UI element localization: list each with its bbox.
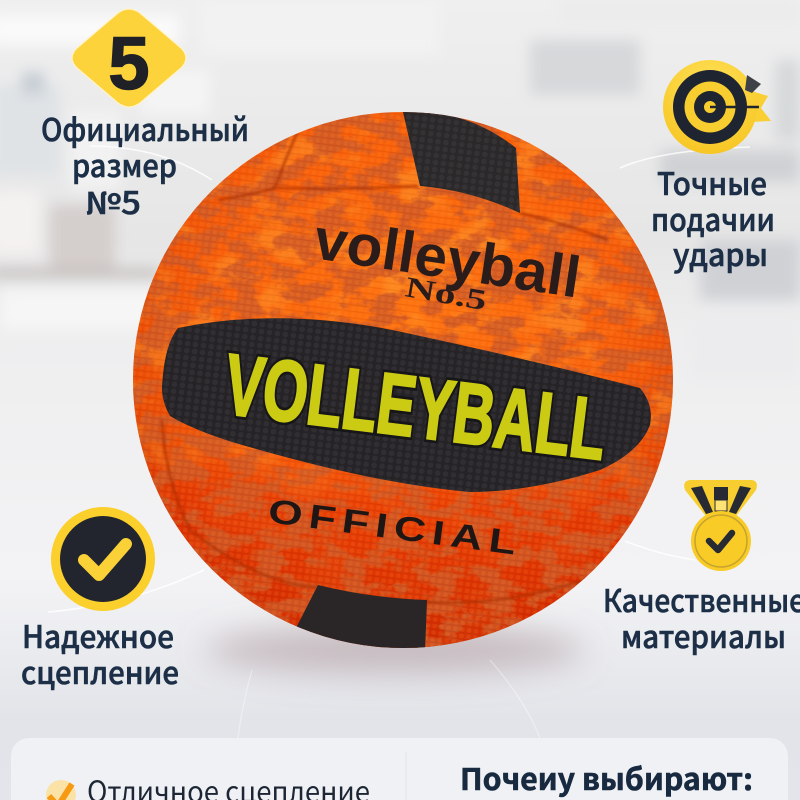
label: VOLLEYBALL: [220, 337, 612, 479]
ball mottled texture: [133, 112, 673, 648]
bottom black panel: [296, 585, 427, 652]
heading: reliable grip: сцепление: [21, 648, 179, 693]
heading: accurate serves: [651, 159, 775, 275]
heading: official size: №5: [85, 178, 141, 223]
ball shadow: [205, 626, 585, 674]
heading: accurate serves: удары: [673, 230, 768, 275]
label: volleyball script: volleyball: [310, 207, 585, 310]
top black panel: [403, 112, 520, 213]
ball light patches: [133, 112, 673, 648]
heading: quality materials: [603, 576, 800, 657]
heading: quality materials: материалы: [621, 612, 786, 657]
icon: size 5 diamond: 5: [108, 22, 150, 105]
icon: reliable grip check: [51, 507, 155, 611]
heading: reliable grip: Надежное: [22, 612, 174, 657]
ball pebble texture: [133, 112, 673, 648]
panel heading: Почеиу выбирают:: [460, 755, 753, 799]
panel: benefits: [11, 738, 788, 800]
icon: size 5 diamond: [72, 9, 186, 107]
heading: accurate serves: подачии: [651, 195, 775, 240]
ball seams: [162, 133, 625, 603]
heading: accurate serves: Точные: [657, 159, 767, 204]
lower ball tint: [144, 453, 661, 648]
heading: official size: Официальный: [41, 105, 249, 150]
callout curves: [48, 146, 750, 612]
label: OFFICIAL: OFFICIAL: [266, 492, 525, 563]
floor lines: [238, 660, 540, 738]
icon: orange check: [46, 780, 76, 800]
icon: quality medal: [684, 480, 757, 571]
heading: official size: [41, 105, 249, 223]
label: VOLLEYBALL: VOLLEYBALL: [220, 337, 612, 479]
label: VOLLEYBALL: VOLLEYBALL: [220, 337, 612, 479]
heading: official size: размер: [72, 141, 177, 186]
icon: target with arrow: [663, 60, 771, 154]
black band: [162, 318, 651, 492]
label: No.5: No.5: [403, 271, 489, 317]
volleyball: [133, 112, 673, 652]
heading: reliable grip: [21, 612, 179, 693]
